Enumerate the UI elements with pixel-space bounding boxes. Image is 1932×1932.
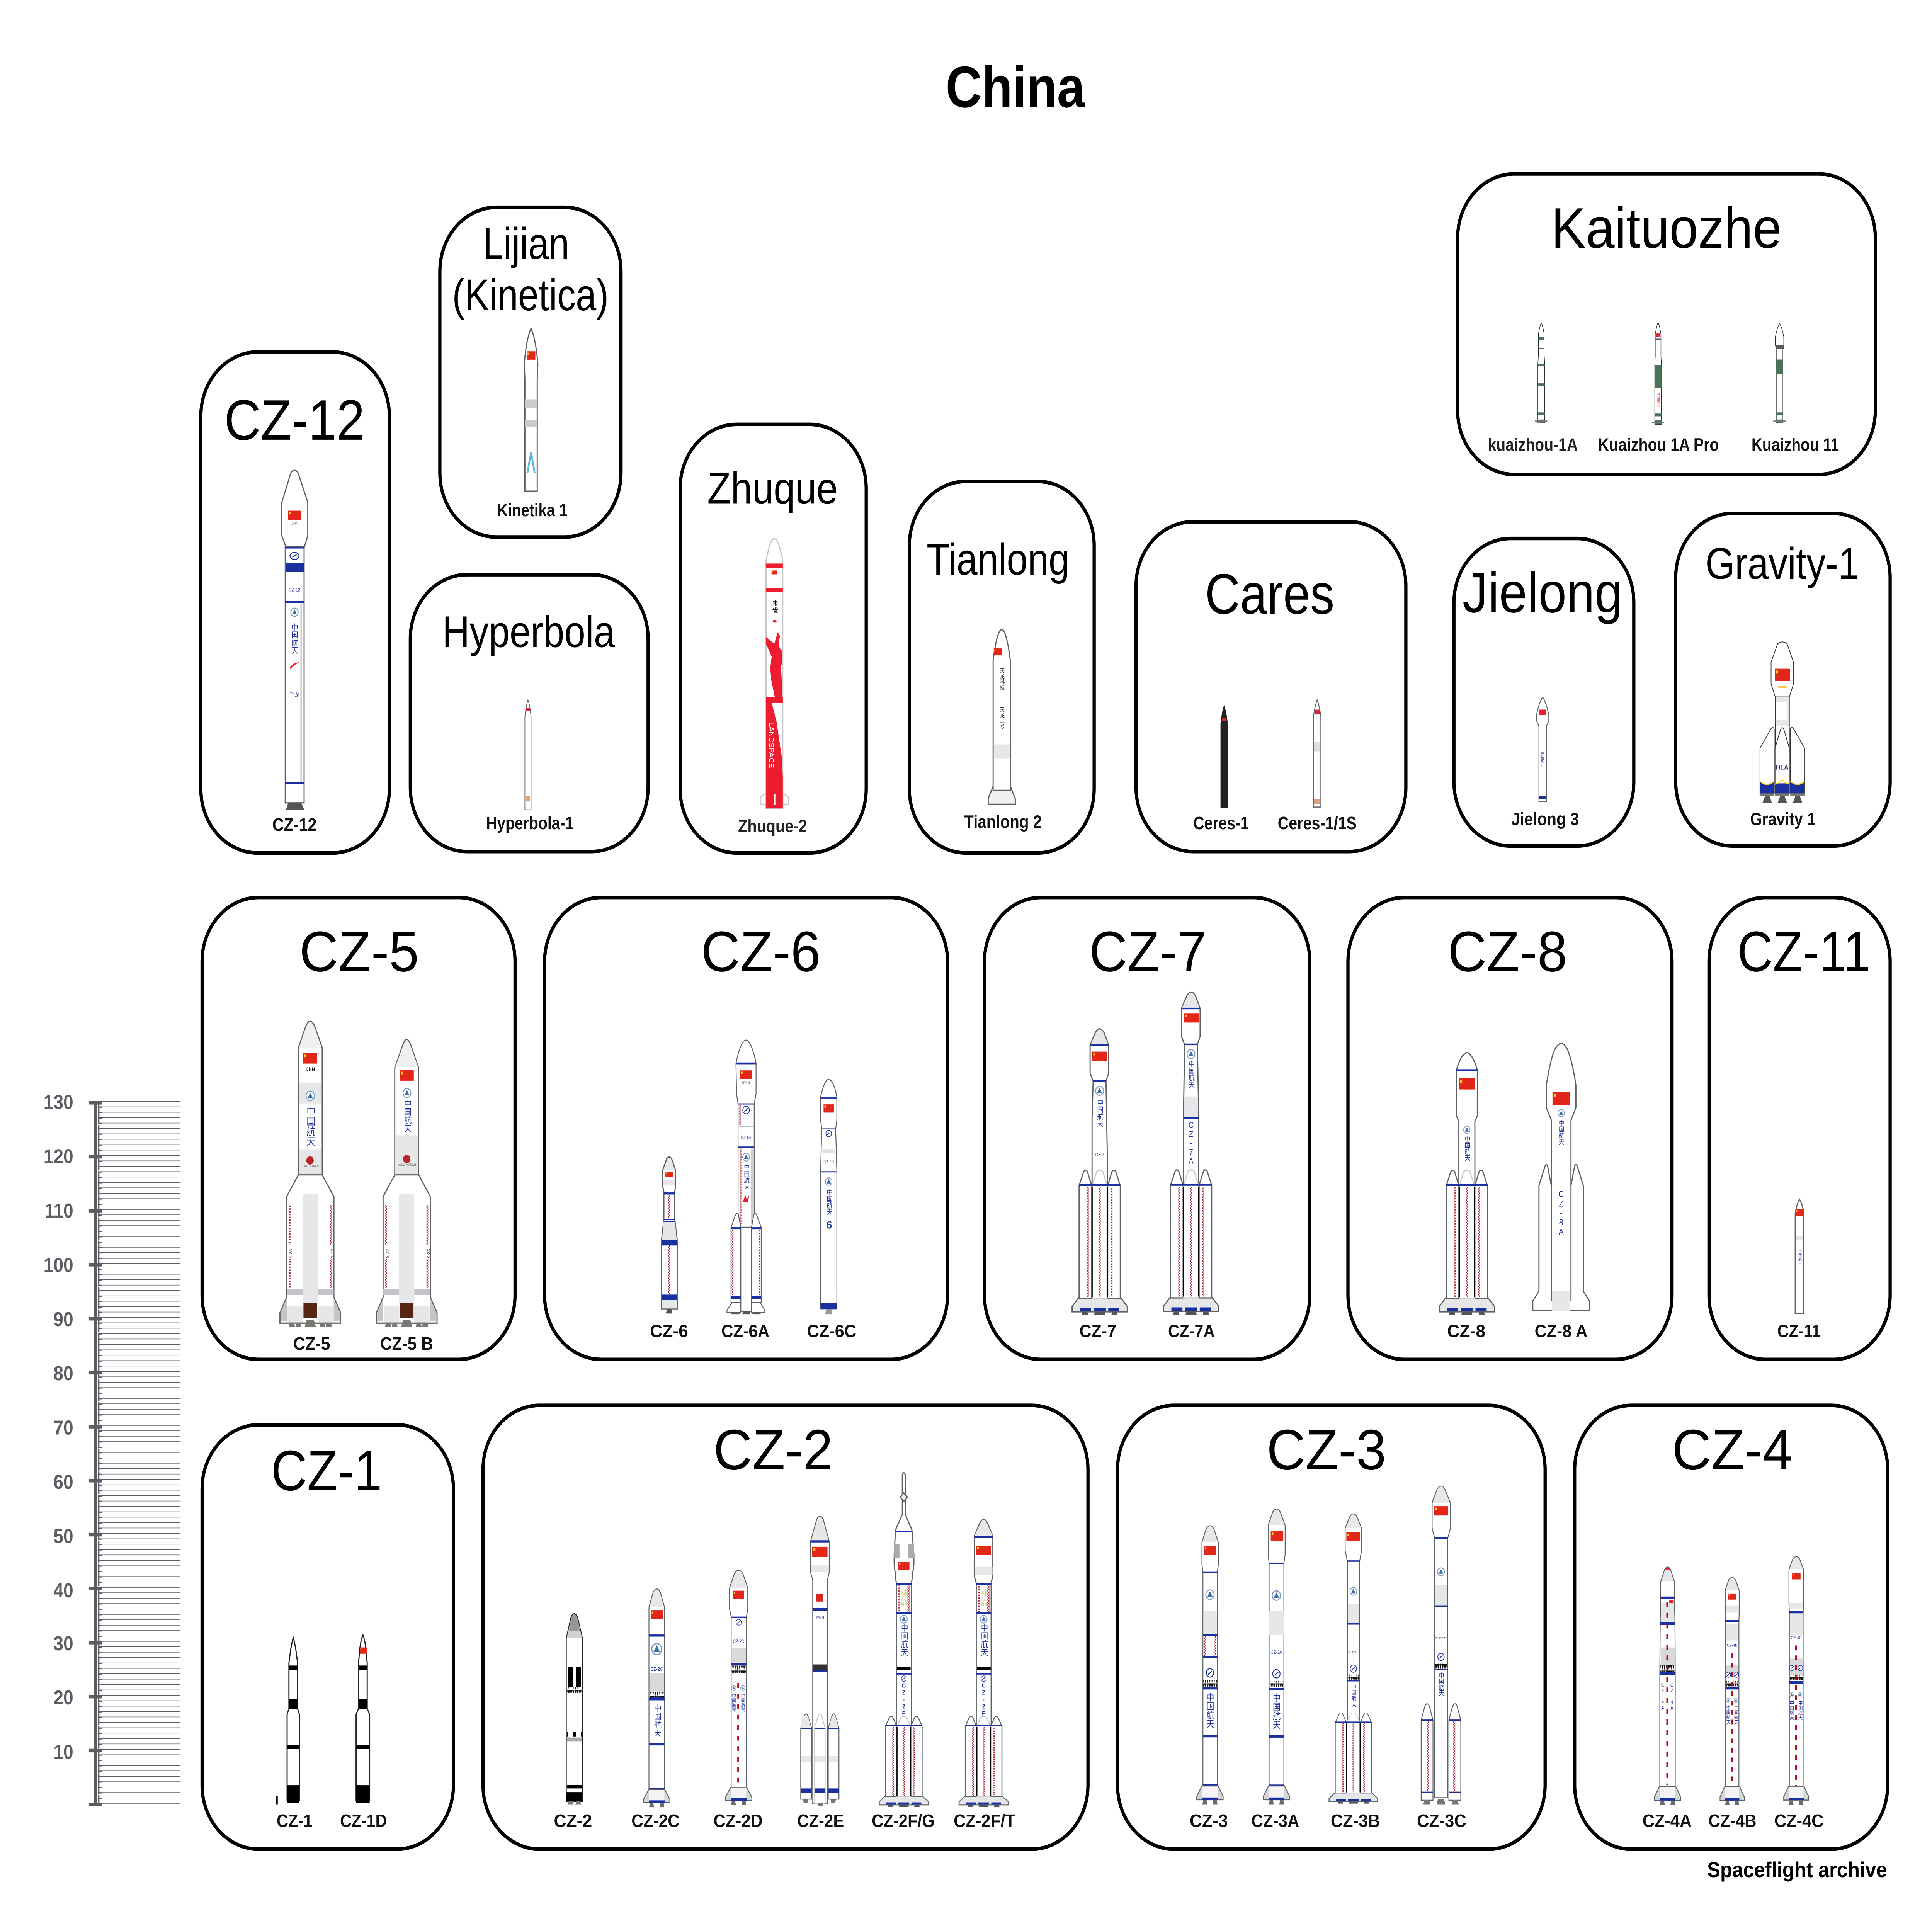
rocket: CZ-4C: 中国航天 [1798,1700,1803,1720]
panel: CZ-3: CZ-3 [1267,1418,1386,1481]
rocket: CZ-8: CZ-8 [1464,1192,1470,1222]
rocket: CZ-5 B: CZ-5 B [380,1334,433,1354]
rocket: CZ-3C: 中国航天 [1438,1672,1444,1696]
rocket: Tianlong 2: 天龙科技 [999,668,1005,690]
rocket: kuaizhou-1A [1488,323,1578,455]
panel: CZ-1 [202,1425,453,1849]
rocket: CZ-3 [1190,1526,1228,1831]
panel: CZ-1: CZ-1 [271,1439,382,1502]
rocket: CZ-3A: CZ-3A [1251,1811,1299,1831]
panel: Jielong: Jielong [1463,561,1623,624]
rocket: CZ-6: CZ-6 [650,1321,688,1341]
rocket: Kuaizhou 11 [1752,323,1839,455]
rocket: CZ-3: 中国航天 [1206,1693,1214,1728]
rocket: CZ-12: CZ-12 [272,815,317,835]
rocket: Hyperbola-1 [486,700,573,833]
panel: CZ-12 [201,352,389,853]
height ruler: 110 [44,1199,73,1222]
panel: CZ-8: CZ-8 [1448,920,1567,983]
height ruler: 80 [53,1362,73,1385]
credit: Spaceflight archive [1707,1858,1887,1882]
rocket: Tianlong 2 [964,629,1042,832]
rocket: CZ-6A: CZ-6A [721,1321,769,1341]
rocket: CZ-5: CZ-5 [293,1334,330,1354]
rocket: CZ-4B: 中国航天 [1726,1705,1731,1725]
panel: Cares: Cares [1205,562,1334,626]
rocket: CZ-8: 中国航天 [1464,1135,1470,1161]
rocket: Zhuque-2: Zhuque-2 [738,816,807,836]
rocket: CZ-4A: CZ-4A [1669,1682,1674,1711]
rocket: Jielong 3 [1511,697,1579,829]
panel: CZ-2: CZ-2 [713,1418,833,1481]
rocket: CZ-8 A: CZ-8A [1557,1190,1565,1237]
rocket: CZ-2D: CZ-2D [733,1639,745,1644]
rocket: CZ-2C: 中国航天 [653,1704,662,1737]
rocket: Ceres-1/1S [1278,700,1357,833]
rocket: CZ-4A [1643,1567,1692,1831]
rocket: kuaizhou-1A: kuaizhou-1A [1488,435,1578,455]
rocket: CZ-8 [1439,1053,1495,1341]
panel: Tianlong: Tianlong [927,534,1070,585]
rocket: CZ-11: CZ-11 [1777,1321,1820,1341]
rocket: CZ-7A: 中国航天 [1187,1060,1195,1088]
rocket: CZ-6A: 中国航天 [743,1164,750,1190]
height ruler: 50 [53,1525,73,1548]
rocket: Gravity 1 [1750,642,1816,829]
rocket: CZ-2F/T [954,1519,1015,1831]
panel: Kaituozhe [1458,174,1875,474]
panel: CZ-4 [1575,1405,1888,1849]
rocket: CZ-3B: 中国航天 [1350,1684,1356,1707]
panel: CZ-8 [1348,898,1672,1359]
rocket: CZ-6A: CZ-6A [741,1136,752,1140]
rocket: CZ-2D [713,1570,763,1831]
rocket: CZ-6C: CZ-6C [823,1160,834,1165]
rocket: CZ-4C: 中国航天 [1789,1700,1794,1720]
panel: Hyperbola [410,575,648,852]
rocket: CZ-7A: CZ-7A [1187,1121,1195,1166]
rocket: CZ-2F/G: 神箭 [900,1589,908,1606]
panel: CZ-6: CZ-6 [701,920,821,983]
rocket: Kuaizhou 11: Kuaizhou 11 [1752,435,1839,455]
rocket: CZ-2D: 中国航天 [731,1693,736,1713]
rocket: CZ-6C: 中国航天 [826,1189,833,1215]
rocket: CZ-6A [721,1040,769,1341]
panel: Cares [1136,522,1406,852]
panel: Zhuque [680,424,866,853]
rocket: CZ-2 [554,1614,592,1831]
panel: CZ-3 [1117,1405,1545,1849]
height ruler: 10 [53,1741,73,1763]
rocket: CZ-7: 中国航天 [1096,1099,1103,1127]
rocket: CZ-4A: CZ-4A [1643,1811,1692,1831]
rocket: CZ-8 A: 中国航天 [1558,1120,1564,1145]
height ruler: 120 [44,1145,73,1168]
rocket: CZ-2F/T: CZ-2F/T [954,1811,1015,1831]
rocket: CZ-4B: CZ-4B [1727,1643,1738,1648]
rocket: CZ-5: CHN [306,1067,315,1072]
rocket: CZ-11 [1777,1199,1820,1341]
rocket: CZ-4C: CZ-4C [1791,1636,1802,1640]
title: China [946,55,1085,120]
rocket: CZ-3C [1417,1486,1466,1831]
height ruler [44,1091,140,1806]
rocket: CZ-5: 中国航天 [305,1106,315,1146]
rocket: CZ-2E: CZ-2E [797,1811,844,1831]
rocket: CZ-11: 中国航天 [1798,1249,1802,1265]
rocket: CZ-4C [1774,1557,1823,1831]
rocket: CZ-4B: 中国航天 [1733,1705,1739,1725]
panel: Zhuque: Zhuque [707,464,838,514]
rocket: CZ-1D: CZ-1D [340,1811,387,1831]
rocket: Gravity 1: HLA [1776,763,1789,771]
rocket: CZ-12: 中国航天 [291,623,298,654]
rocket: CZ-8 A: CZ-8 A [1535,1321,1588,1341]
panel: Jielong [1454,539,1634,846]
rocket: Tianlong 2: 天龙二号 [999,707,1005,729]
rocket: CZ-3B [1329,1514,1380,1831]
rocket: CZ-7 [1072,1029,1127,1341]
panel: CZ-7: CZ-7 [1089,920,1206,983]
rocket: Zhuque-2: LANDSPACE [767,722,775,768]
panel: CZ-2 [483,1405,1088,1849]
rocket: CZ-2D: CZ-2D [713,1811,763,1831]
rocket: Kinetika 1: Kinetika 1 [497,500,567,520]
panel: CZ-11: CZ-11 [1737,920,1871,983]
rocket: CZ-2: CZ-2 [554,1811,592,1831]
rocket: CZ-6 [650,1157,688,1341]
rocket: CZ-2C [631,1589,680,1831]
rocket: CZ-2F/G [872,1473,935,1831]
rocket: Ceres-1/1S: Ceres-1/1S [1278,813,1357,833]
rocket: CZ-2F/G: CZ-2F/G [872,1811,935,1831]
rocket: Kuaizhou 1A Pro [1598,322,1719,455]
rocket: CZ-1D [340,1635,387,1831]
rocket: CZ-3A: CZ-3A [1271,1650,1282,1655]
rocket: Tianlong 2: Tianlong 2 [964,812,1042,832]
rocket: Kinetika 1 [497,328,567,520]
rocket: CZ-8 A [1533,1044,1590,1341]
panel: Gravity-1 [1676,514,1890,846]
panel: CZ-11 [1709,898,1890,1359]
rocket: CZ-1: CZ-1 [277,1811,312,1831]
panel: Lijian (Kinetica): (Kinetica) [452,270,609,320]
panel: Tianlong [909,481,1094,853]
rocket: CZ-2F/T: 中国航天 [980,1624,988,1656]
rocket: CZ-12: 飞龙 [289,692,299,698]
rocket: CZ-2C: CZ-2C [650,1666,663,1672]
rocket: Zhuque-2: 朱雀 [771,600,778,613]
panel: CZ-6 [544,898,947,1359]
height ruler: 60 [53,1471,73,1493]
height ruler: 130 [44,1091,73,1114]
panel: Lijian (Kinetica): Lijian [483,219,569,269]
rocket: CZ-1 [276,1638,312,1831]
panel: Kaituozhe: Kaituozhe [1551,196,1782,260]
rocket: CZ-5 [280,1021,340,1354]
height ruler: 90 [53,1308,73,1330]
rocket: CZ-3A [1251,1509,1299,1831]
rocket: CZ-3B: CZ-3B/YZ-1 [1347,1651,1360,1654]
height ruler: 100 [44,1254,73,1276]
height ruler: 20 [53,1687,73,1709]
panel: CZ-5: CZ-5 [299,920,419,983]
rocket: CZ-5 B: 中国航天 [403,1099,412,1133]
rocket: Kuaizhou 1A Pro: Kuaizhou 1A Pro [1598,435,1719,455]
rocket: CZ-7A [1163,992,1219,1341]
rocket: CZ-7A: CZ-7A [1168,1321,1215,1341]
rocket: CZ-2F/G: CZ-2F [901,1682,907,1717]
rocket: CZ-6A: CHN [742,1081,750,1085]
rocket: CZ-2F/G: 中国航天 [900,1624,908,1656]
rocket: CZ-2C: CZ-2C [631,1811,680,1831]
rocket: CZ-6C [807,1079,856,1341]
rocket: CZ-3B: CZ-3B [1331,1811,1380,1831]
rocket: CZ-3C: CZ-3B/YZ-1 [1434,1637,1447,1640]
panel: CZ-7 [985,898,1310,1359]
panel: CZ-4: CZ-4 [1672,1418,1793,1481]
rocket: CZ-3: CZ-3 [1190,1811,1228,1831]
panel: Gravity-1: Gravity-1 [1705,539,1859,588]
rocket: CZ-12: CHN [291,521,298,526]
panel: CZ-12: CZ-12 [224,388,365,452]
panel: CZ-5 [202,898,515,1359]
height ruler: 40 [53,1579,73,1602]
rocket: CZ-2F/T: CZ-2F [981,1682,987,1717]
rocket: CZ-4B [1708,1578,1757,1831]
rocket: Ceres-1: Ceres-1 [1193,813,1249,833]
rocket: Zhuque-2 [738,539,807,836]
rocket: CZ-6C: CZ-6C [807,1321,856,1341]
rocket: CZ-7: CZ-7 [1079,1321,1116,1341]
rocket: CZ-12: CZ-12 [289,588,300,593]
rocket: CZ-5: LONG MARCH [301,1165,319,1168]
rocket: CZ-2E [797,1516,844,1831]
rocket: CZ-8: CZ-8 [1447,1321,1485,1341]
rocket: CZ-4C: CZ-4C [1774,1811,1823,1831]
rocket: CZ-2E: LM-2E [814,1615,826,1620]
rocket: CZ-2F/T: 神箭 [980,1589,988,1606]
rocket: CZ-3C: CZ-3C [1417,1811,1466,1831]
height ruler: 70 [53,1417,73,1439]
rocket: CZ-4B: CZ-4B [1708,1811,1757,1831]
rocket: Jielong 3: Jielong 3 [1511,809,1579,829]
rocket: Kuaizhou 1A Pro: 中国航天 [1656,392,1660,407]
rocket: CZ-6C: 6 [827,1218,832,1231]
height ruler: 30 [53,1632,73,1655]
panel: Lijian (Kinetica) [440,207,621,537]
rocket: CZ-12 [272,470,317,835]
rocket: CZ-5 B [376,1039,437,1354]
rocket: CZ-7: CZ-7 [1095,1153,1104,1158]
rocket: Gravity 1: Gravity 1 [1750,809,1816,829]
rocket: CZ-4A: CZ-4A [1660,1682,1665,1711]
rocket: CZ-2D: 中国航天 [741,1693,745,1713]
rocket: Jielong 3: 中国航天 [1541,751,1544,766]
rocket: CZ-5 B: LONG MARCH [398,1163,416,1167]
rocket: Hyperbola-1: Hyperbola-1 [486,813,573,833]
rocket: CZ-3A: 中国航天 [1272,1693,1281,1729]
panel: Hyperbola: Hyperbola [442,607,615,657]
rocket: Ceres-1 [1193,707,1249,833]
